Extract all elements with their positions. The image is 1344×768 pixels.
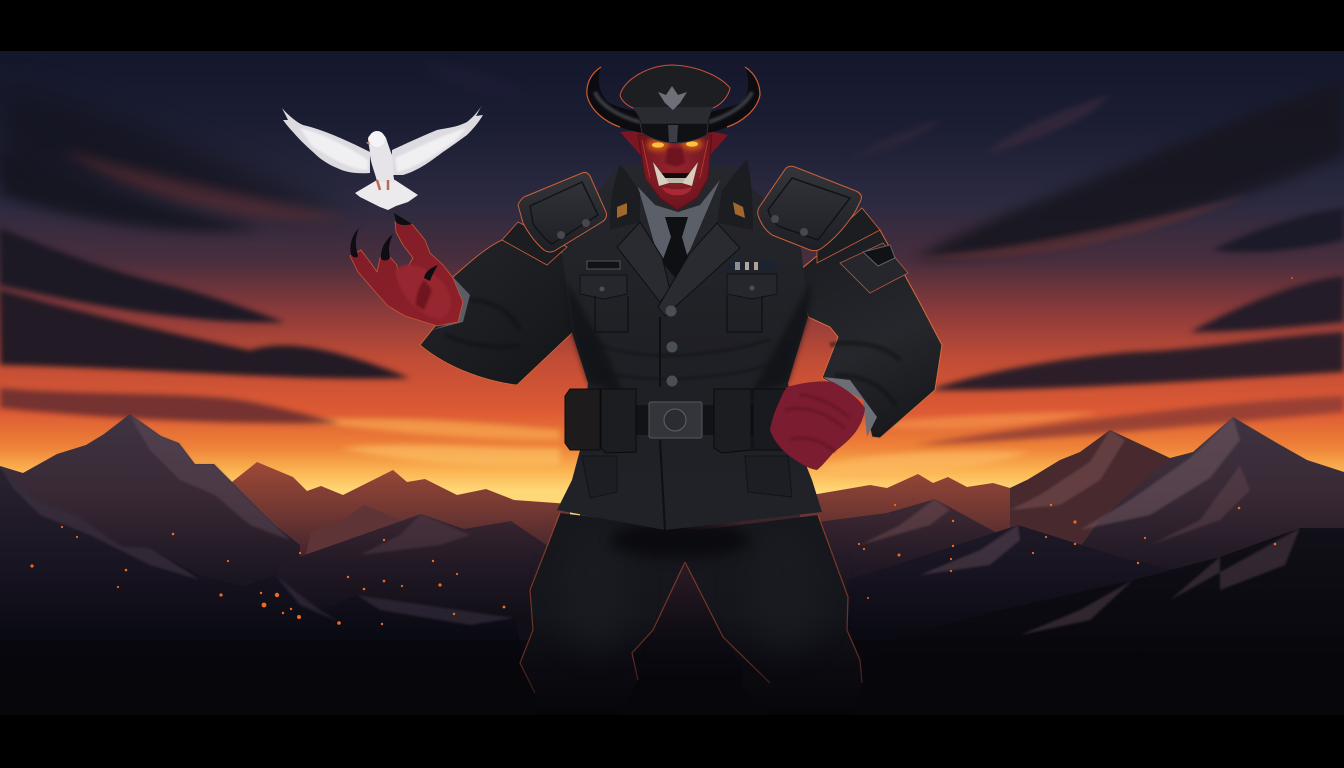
nose [665, 148, 685, 167]
chest pockets [580, 274, 777, 299]
jacket [557, 160, 822, 530]
dove body [368, 133, 395, 182]
glowing eyes [647, 139, 669, 151]
cap badge [658, 86, 687, 110]
left shoulder armor [502, 172, 606, 265]
right shoulder armor [758, 166, 908, 293]
left peak [0, 414, 300, 600]
ears [620, 130, 728, 157]
lower lip [662, 187, 692, 195]
right fist [770, 381, 865, 470]
left pouches [565, 389, 600, 450]
officer cap [620, 65, 730, 143]
raised demon hand [350, 213, 463, 326]
lower pockets [582, 456, 792, 498]
dove left wing [282, 108, 370, 173]
middle mountain range [279, 499, 1040, 650]
left sleeve [420, 240, 590, 385]
sunset sky [0, 51, 1344, 621]
ember sparks [30, 277, 1293, 625]
medal bars [587, 261, 620, 269]
buttons [600, 286, 754, 386]
arm patch [840, 243, 908, 293]
horns [587, 67, 760, 133]
right pouches [714, 389, 751, 453]
dark clouds right [850, 80, 1344, 445]
claws [350, 213, 438, 281]
trousers [520, 513, 862, 715]
belt with pouches [565, 389, 785, 453]
left cuff [432, 277, 470, 330]
right cuff [823, 377, 877, 437]
shirt and tie [638, 180, 720, 270]
far mountain range [232, 417, 1344, 620]
near mountain range [0, 468, 1344, 715]
dove tail [355, 180, 418, 210]
dove [282, 105, 483, 210]
mouth with teeth [661, 173, 692, 182]
collar insignia [617, 202, 745, 218]
tusks [653, 162, 698, 186]
dove right wing [392, 105, 483, 175]
center seam [660, 317, 665, 530]
tie [662, 217, 689, 280]
upper collar [610, 160, 753, 230]
lapels [617, 222, 670, 302]
face [638, 135, 712, 210]
right sleeve [800, 220, 942, 438]
demon head [620, 130, 728, 210]
ground behind the legs [580, 495, 800, 715]
belt buckle [649, 402, 702, 438]
dark clouds left [0, 62, 530, 423]
